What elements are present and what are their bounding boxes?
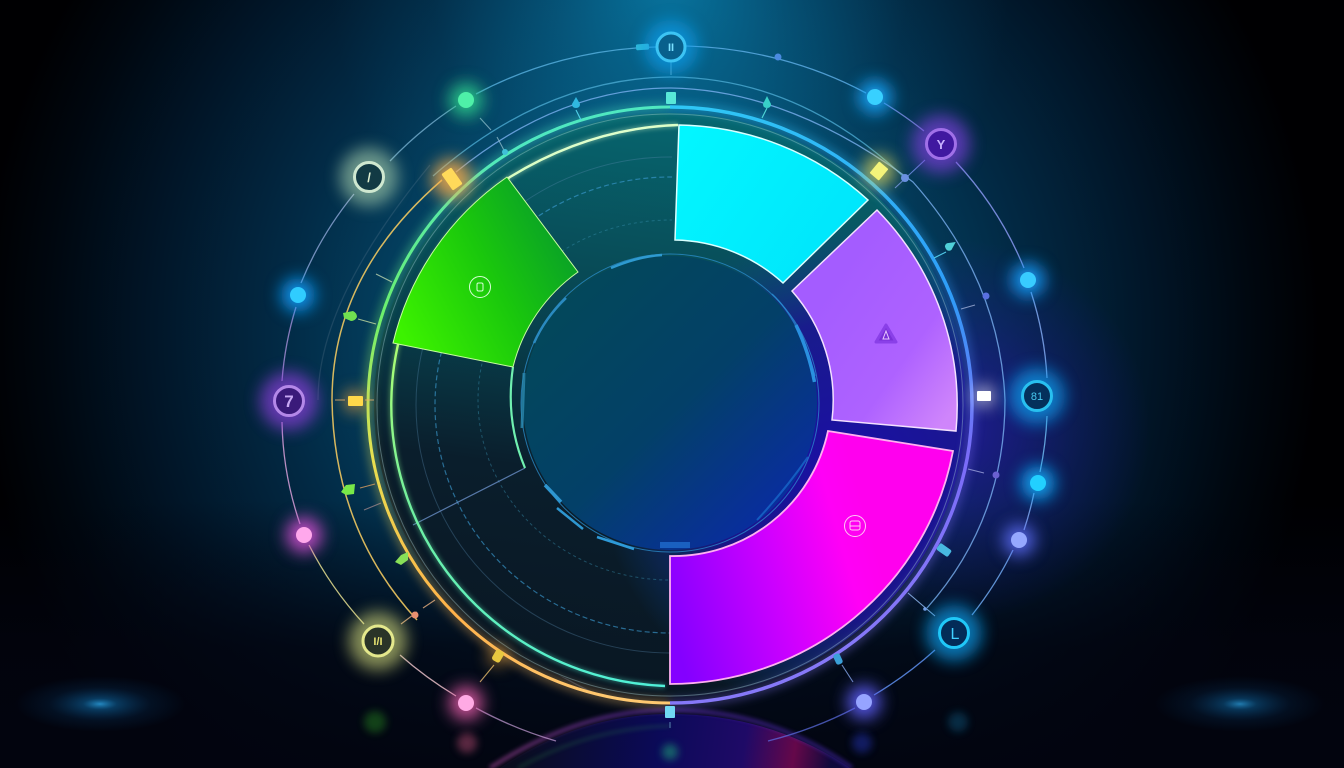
node: top blue: II	[668, 42, 674, 54]
tick marks and leader lines	[335, 62, 984, 728]
outer ring with glow	[368, 107, 972, 703]
node: blue lower right: L	[951, 626, 960, 643]
inner hub ring and dashes	[521, 254, 819, 552]
middle orbit arcs	[318, 77, 1005, 696]
segment: cyan	[675, 125, 868, 283]
node: blue right: 81	[1031, 391, 1043, 403]
thin rim of the empty segments	[391, 125, 678, 686]
node: pale green upper left	[340, 148, 398, 206]
chart disc base	[374, 113, 966, 697]
outermost orbit with connector arcs	[282, 46, 1047, 741]
icon: magenta segment badge	[844, 516, 866, 536]
central circle	[521, 254, 819, 552]
disc right side tint	[374, 113, 966, 697]
node: top blue	[644, 20, 698, 74]
segment: magenta	[670, 431, 953, 684]
node: blue right	[1009, 368, 1065, 424]
node: violet left: 7	[284, 392, 294, 411]
ring markers	[341, 44, 1000, 718]
node: pale green upper left: /	[367, 170, 371, 185]
orbit nodes: plain dots	[281, 80, 1055, 720]
icon: warning triangle	[876, 325, 896, 342]
node: violet top right	[912, 115, 970, 173]
segment: violet	[792, 210, 957, 431]
segment: green	[393, 177, 578, 367]
floor lights	[15, 676, 1325, 732]
node: violet left	[260, 372, 318, 430]
floor reflection of the chart	[364, 710, 968, 768]
node: yellow lower left	[349, 612, 407, 670]
node: violet top right: Y	[937, 137, 946, 152]
node: blue lower right	[926, 605, 982, 661]
icon: green segment badge	[470, 276, 490, 298]
node: yellow lower left: I/I	[373, 636, 383, 648]
inner grid arcs in empty segments	[412, 156, 672, 654]
marker glows	[344, 155, 995, 666]
